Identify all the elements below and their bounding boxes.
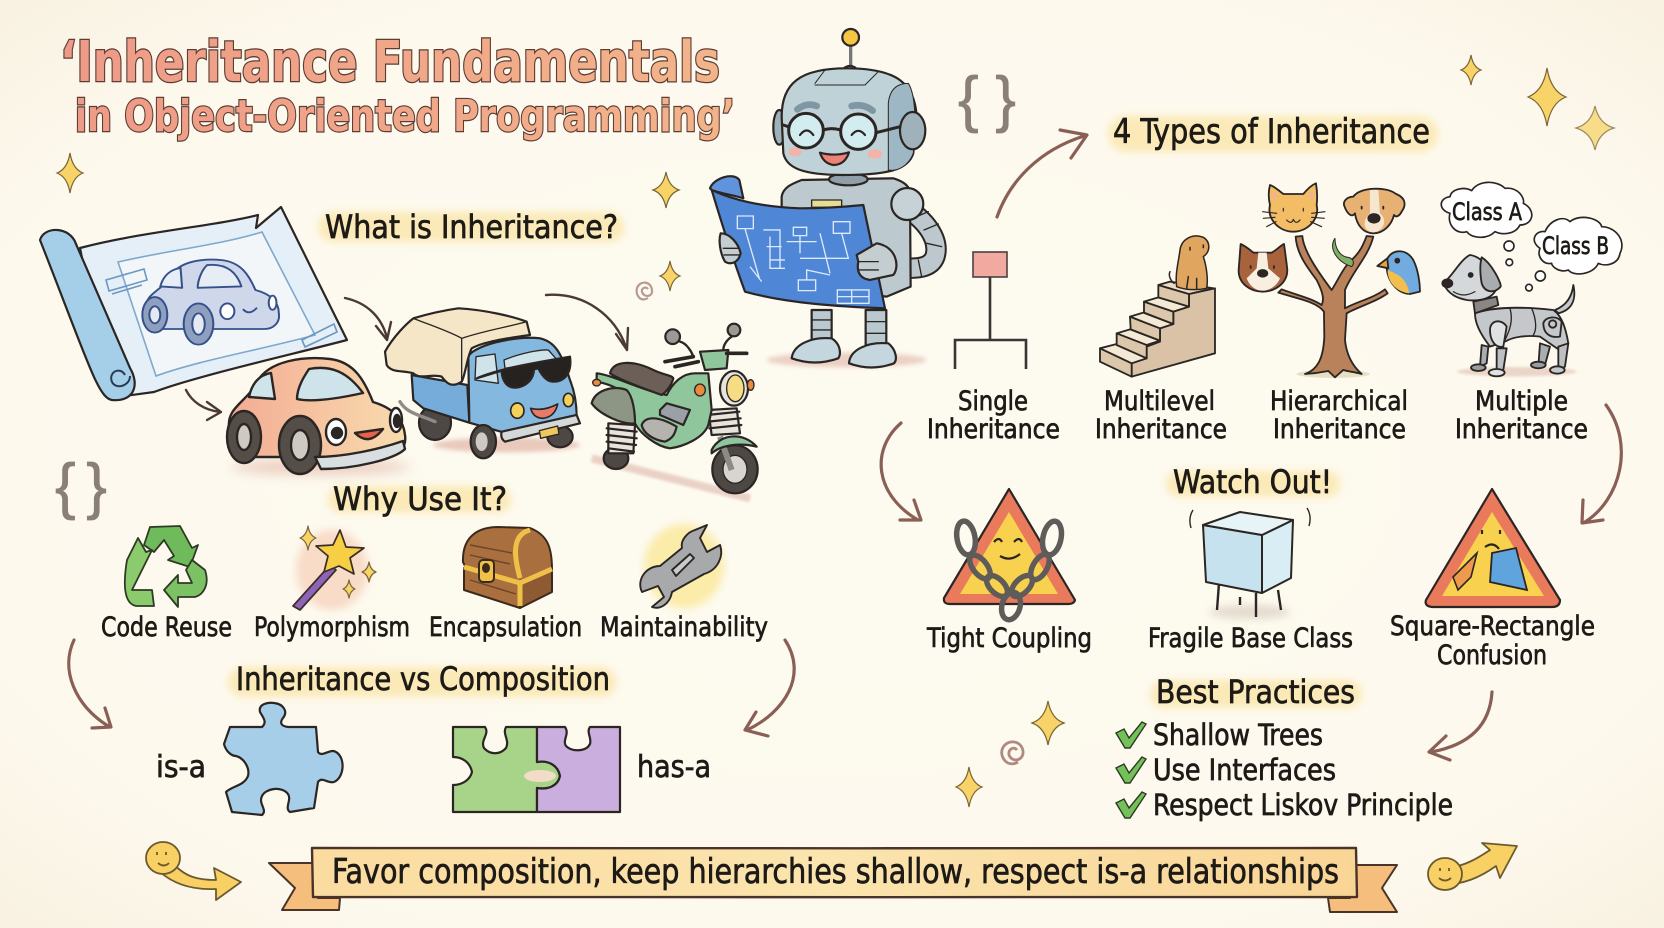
arrows: flow curves (69, 405, 1621, 760)
panel: 4 types of inheritance: Inheritance (1095, 414, 1227, 445)
icon: smiley arrow right (1428, 843, 1517, 890)
robot hands (720, 233, 896, 280)
icon: treasure chest (463, 527, 552, 608)
panel: watch out: Confusion (1437, 640, 1547, 671)
heading: inheritance vs composition: Inheritance vs Composition (236, 660, 610, 698)
icon: wrench (640, 524, 724, 608)
icon: truck with sunglasses (385, 308, 580, 458)
heading: why use it: Why Use It? (333, 480, 507, 518)
icon: smiley arrow left (146, 842, 241, 900)
panel: inheritance vs composition (156, 660, 711, 815)
icon: blueprint car (142, 260, 279, 345)
label: has-a: has-a (637, 750, 711, 785)
panel: 4 types of inheritance: Multilevel (1104, 386, 1215, 417)
panel: 4 types of inheritance (927, 112, 1622, 445)
robot blueprint sheet (710, 176, 885, 308)
panel: why use it (101, 480, 768, 643)
title: ‘Inheritance Fundamentals (60, 30, 720, 95)
diagram: hierarchical tree (1239, 183, 1420, 378)
diagram: single inheritance: Inheritance (927, 414, 1060, 445)
icon: motorcycle (592, 324, 758, 498)
panel: watch out (926, 463, 1595, 671)
robot legs (792, 310, 896, 367)
icon: puppy (1239, 244, 1287, 292)
robot arm (897, 207, 942, 277)
icon: dog head (1344, 189, 1405, 233)
panel: why use it: Encapsulation (429, 612, 582, 643)
checklist item: Respect Liskov Principle (1153, 788, 1453, 822)
panel: best practices (1116, 673, 1453, 822)
decorative sparkles and swirls (57, 55, 1614, 807)
title (60, 30, 735, 142)
curly braces: { } (958, 65, 1016, 134)
antenna (841, 29, 859, 72)
panel: 4 types of inheritance: Inheritance (1273, 414, 1406, 445)
icon: cat (1263, 183, 1325, 232)
heading: 4 types: 4 Types of Inheritance (1113, 112, 1430, 152)
diagram: single inheritance (927, 252, 1060, 445)
robot mascot holding blueprint (710, 29, 942, 367)
panel: what is inheritance (40, 207, 758, 498)
panel: why use it: Polymorphism (254, 612, 410, 643)
banner: takeaway: Favor composition, keep hierarchies shallow, respect is-a relationships (332, 852, 1339, 892)
label: is-a: is-a (156, 750, 206, 785)
arrows: blueprint to vehicles (186, 295, 628, 420)
icon: square rectangle warning triangle (1426, 489, 1560, 607)
heading: best practices: Best Practices (1156, 673, 1355, 711)
icon: magic wand (293, 526, 376, 610)
panel: watch out: Square-Rectangle (1390, 611, 1595, 642)
panel: 4 types of inheritance: Class B (1542, 232, 1609, 260)
icon: peach car (227, 358, 410, 474)
robot head (773, 68, 925, 175)
curly braces: { } (55, 452, 107, 521)
icon: blue puzzle piece (224, 703, 343, 815)
icon: bird (1377, 251, 1420, 294)
icon: blueprint scroll (40, 207, 347, 400)
heading: what is inheritance: What is Inheritance? (325, 208, 618, 246)
banner: takeaway (269, 848, 1397, 912)
panel: watch out: Fragile Base Class (1148, 623, 1353, 654)
icon: dog on stairs (1169, 236, 1209, 290)
robot torso (782, 173, 923, 297)
arrow: robot to types (997, 130, 1087, 217)
checklist item: Shallow Trees (1153, 718, 1323, 752)
panel: 4 types of inheritance: Multiple (1475, 386, 1568, 417)
panel: 4 types of inheritance: Hierarchical (1270, 386, 1408, 417)
callout: class B (1526, 217, 1622, 291)
diagram: single inheritance: Single (958, 386, 1028, 417)
icon: chain warning triangle (944, 489, 1075, 622)
panel: watch out: Tight Coupling (926, 623, 1092, 654)
heading: watch out: Watch Out! (1173, 463, 1332, 501)
panel: 4 types of inheritance: Inheritance (1455, 414, 1588, 445)
panel: why use it: Code Reuse (101, 612, 232, 643)
panel: 4 types of inheritance: Class A (1452, 198, 1522, 226)
title: in Object-Oriented Programming’ (75, 91, 735, 142)
icon: fragile glass cube (1190, 508, 1310, 619)
diagram: multilevel stairs (1100, 236, 1215, 377)
icon: green and purple puzzle (453, 727, 620, 812)
checklist item: Use Interfaces (1153, 753, 1336, 787)
callout: class A (1441, 182, 1532, 266)
icon: recycle (125, 526, 207, 607)
panel: why use it: Maintainability (600, 612, 768, 643)
curly braces (55, 65, 1016, 521)
diagram: robot dog multiple inheritance (1441, 182, 1622, 376)
